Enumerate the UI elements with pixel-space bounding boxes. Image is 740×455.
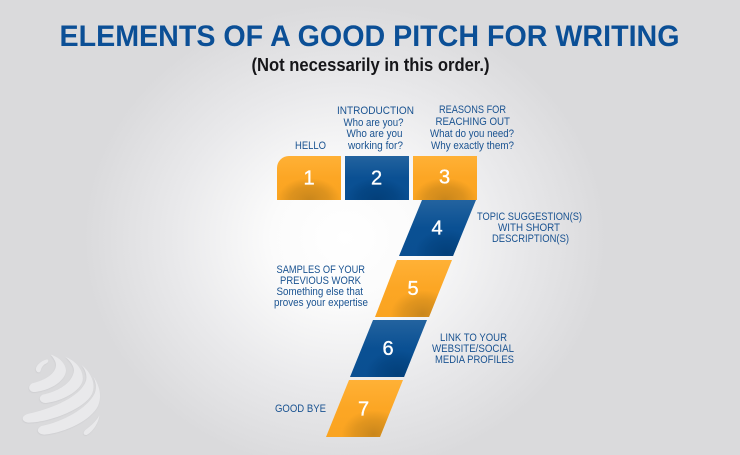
label: reasons for reaching out: REASONS FOR xyxy=(439,104,506,116)
step 5: samples tile xyxy=(375,260,452,317)
label: samples of previous work xyxy=(274,264,368,309)
label: introduction: working for? xyxy=(347,140,403,152)
step 6: link tile: 6 xyxy=(382,338,394,360)
label: reasons for reaching out: What do you need? xyxy=(430,128,514,140)
step 2: introduction tile: 2 xyxy=(371,168,382,190)
label: good bye: GOOD BYE xyxy=(275,403,326,415)
icon: striped globe watermark xyxy=(23,355,100,435)
step 4: topic tile: 4 xyxy=(431,218,443,240)
label: reasons for reaching out: REACHING OUT xyxy=(436,116,510,128)
subtitle: (Not necessarily in this order.) xyxy=(252,55,490,75)
label: hello: HELLO xyxy=(295,140,326,152)
step 1: hello tile: 1 xyxy=(303,168,315,190)
step 7: good bye tile: 7 xyxy=(358,398,369,420)
step 5: samples tile: 5 xyxy=(407,278,419,300)
label: topic suggestions xyxy=(477,211,582,245)
label: samples of previous work: SAMPLES OF YOUR xyxy=(276,264,365,276)
label: link to website: MEDIA PROFILES xyxy=(435,354,514,366)
label: topic suggestions: DESCRIPTION(S) xyxy=(492,233,569,245)
step 4: topic tile xyxy=(399,200,476,256)
label: topic suggestions: TOPIC SUGGESTION(S) xyxy=(477,211,582,223)
step 3: reasons tile: 3 xyxy=(439,166,450,188)
label: introduction: INTRODUCTION xyxy=(337,105,414,117)
label: introduction xyxy=(337,105,414,152)
step 7: good bye tile xyxy=(326,380,403,437)
step 6: link tile xyxy=(350,320,427,377)
label: link to website xyxy=(432,332,514,366)
title: ELEMENTS OF A GOOD PITCH FOR WRITING xyxy=(60,20,680,53)
step 2: introduction tile xyxy=(345,156,409,200)
label: introduction: Who are you xyxy=(346,128,402,140)
label: reasons for reaching out xyxy=(430,104,514,152)
step 3: reasons tile xyxy=(413,156,477,200)
label: samples of previous work: proves your expertise xyxy=(274,297,368,309)
label: samples of previous work: Something else that xyxy=(276,286,363,298)
label: link to website: WEBSITE/SOCIAL xyxy=(432,343,514,355)
label: topic suggestions: WITH SHORT xyxy=(498,222,560,234)
label: reasons for reaching out: Why exactly them? xyxy=(431,140,514,152)
label: samples of previous work: PREVIOUS WORK xyxy=(280,275,362,287)
label: link to website: LINK TO YOUR xyxy=(440,332,507,344)
label: introduction: Who are you? xyxy=(344,117,404,129)
step 1: hello tile xyxy=(277,156,341,200)
